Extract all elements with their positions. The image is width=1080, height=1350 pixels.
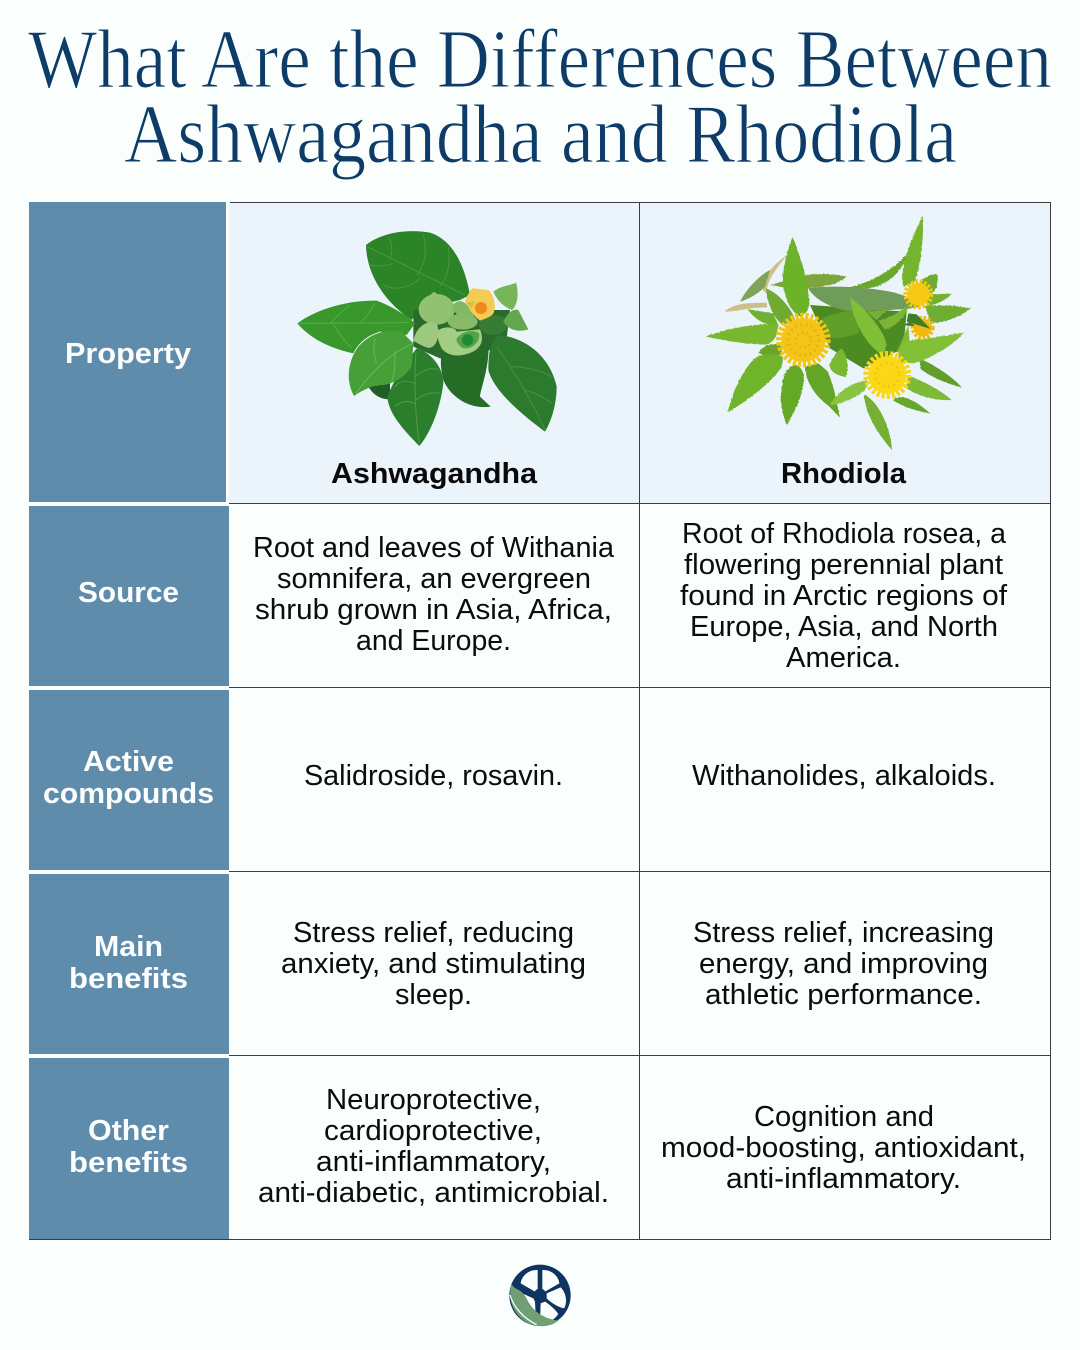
row: Other benefits: cardioprotective, [324, 1115, 542, 1147]
title [28, 13, 1052, 181]
heading: Rhodiola: Rhodiola [781, 458, 907, 490]
row: Other benefits: Other [88, 1115, 169, 1147]
row: Source: flowering perennial plant [684, 549, 1003, 581]
row: Active compounds [29, 690, 996, 870]
row: Other benefits [29, 1058, 1026, 1239]
row: Active compounds: Withanolides, alkaloids. [692, 760, 996, 792]
row: Main benefits: benefits [69, 963, 188, 995]
row: Source: found in Arctic regions of [680, 580, 1008, 612]
row: Main benefits [29, 874, 994, 1054]
row: Main benefits: athletic performance. [705, 979, 982, 1011]
row: Main benefits: Main [94, 931, 163, 963]
row: Other benefits: anti-inflammatory. [726, 1163, 961, 1195]
row: Source: shrub grown in Asia, Africa, [255, 594, 612, 626]
title: Ashwagandha and Rhodiola [124, 88, 957, 181]
row: Active compounds: Active [83, 746, 174, 778]
row: Main benefits: Stress relief, reducing [293, 917, 574, 949]
row: Other benefits: benefits [69, 1147, 188, 1179]
heading: Property: Property [65, 338, 191, 370]
comparison table [29, 202, 1050, 1240]
row: Source: Root of Rhodiola rosea, a [682, 518, 1007, 550]
row: Other benefits: anti-inflammatory, [316, 1146, 551, 1178]
row: Active compounds: compounds [43, 778, 214, 810]
row: Source: Europe, Asia, and North [690, 611, 998, 643]
row: Main benefits: Stress relief, increasing [693, 917, 994, 949]
row: Source: Source [78, 577, 179, 609]
icon: logo [509, 1265, 571, 1326]
row: Main benefits: energy, and improving [699, 948, 988, 980]
row: Main benefits: anxiety, and stimulating [281, 948, 586, 980]
row: Other benefits: Cognition and [754, 1101, 934, 1133]
row: Other benefits: anti-diabetic, antimicrobial. [258, 1177, 609, 1209]
icon: ashwagandha plant [297, 231, 557, 446]
row: Source: and Europe. [356, 625, 511, 657]
row: Main benefits: sleep. [395, 979, 472, 1011]
row: Other benefits: Neuroprotective, [326, 1084, 541, 1116]
row: Other benefits: mood-boosting, antioxidant, [661, 1132, 1026, 1164]
row: plant images header [29, 202, 1050, 503]
row: Active compounds: Salidroside, rosavin. [304, 760, 563, 792]
row: Source: Root and leaves of Withania [253, 532, 615, 564]
heading: Ashwagandha: Ashwagandha [331, 458, 538, 490]
row: Source: America. [786, 642, 901, 674]
icon: rhodiola plant [706, 216, 971, 450]
row: Source: somnifera, an evergreen [277, 563, 591, 595]
row: Source [29, 504, 1050, 687]
